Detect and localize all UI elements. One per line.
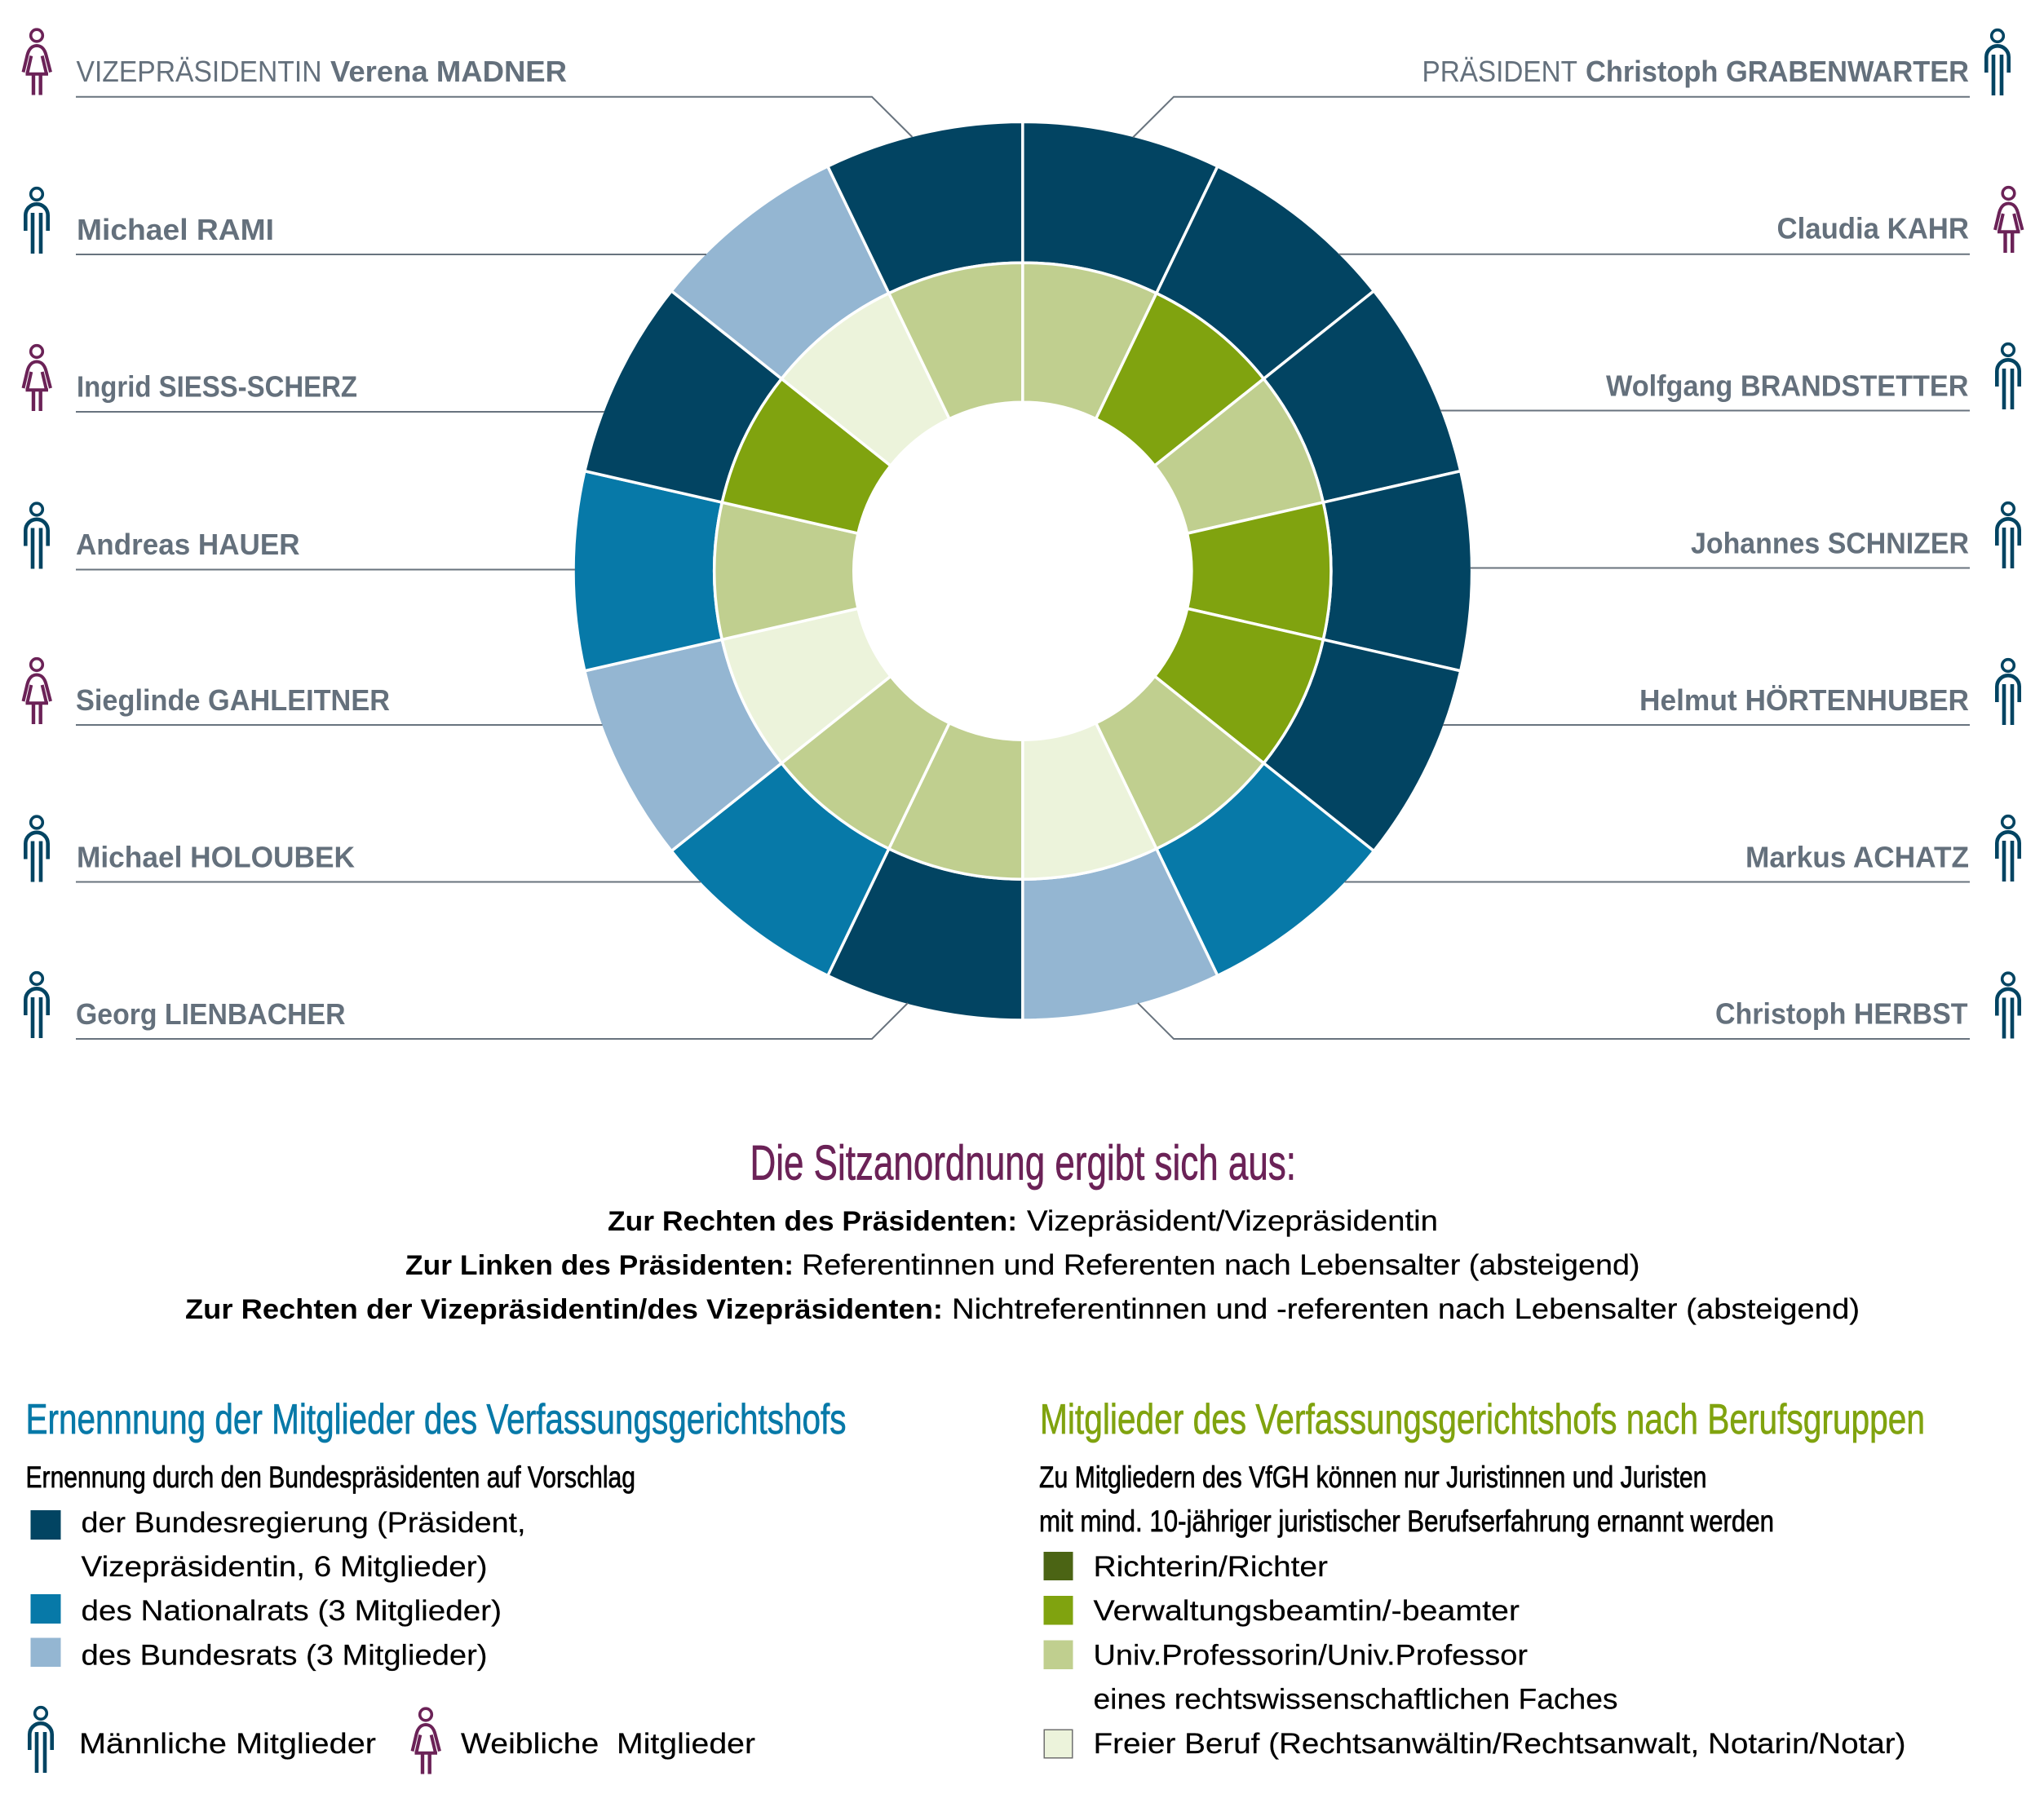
- member row: Markus Achatz: [1344, 816, 2020, 882]
- member row: Claudia Kahr: [1339, 188, 2023, 254]
- name label: Vizepräsidentin Verena Madner: [77, 55, 567, 88]
- name label: Christoph Herbst: Christoph HERBST: [1715, 996, 1967, 1031]
- icon: male member: [1986, 30, 2009, 95]
- icon: male member: [25, 503, 48, 569]
- legend item: federal government: Vizepräsidentin, 6 Mitglieder): [82, 1551, 488, 1583]
- icon: male member: [1997, 660, 2020, 725]
- text line: right of the vice president: Nichtreferentinnen und -referenten nach Lebensalter (absteigend): [952, 1293, 1860, 1325]
- text block: eligibility requirements: Zu Mitgliedern des VfGH können nur Juristinnen und Juristen: [1039, 1460, 1706, 1494]
- text line: right of the president: [608, 1205, 1438, 1237]
- member row: Sieglinde Gahleitner: [23, 659, 602, 725]
- member row: Johannes Schnizer: [1470, 503, 2020, 568]
- name label: Wolfgang Brandstetter: Wolfgang BRANDSTETTER: [1606, 369, 1969, 403]
- legend item: civil servants: Verwaltungsbeamtin/-beamter: [1093, 1595, 1520, 1627]
- icon: male member: [1997, 503, 2020, 568]
- name label: Johannes Schnizer: Johannes SCHNIZER: [1691, 527, 1969, 559]
- panel: appointment legend: [26, 1396, 847, 1774]
- icon: female member: [23, 346, 51, 411]
- outer ring: appointing body: [542, 82, 1504, 1060]
- name label: Präsident Christoph Grabenwarter: [1422, 55, 1969, 88]
- name label: Sieglinde Gahleitner: Sieglinde GAHLEITNER: [76, 683, 390, 717]
- legend item: female members: [413, 1708, 755, 1774]
- text line: left of the president: [405, 1249, 1639, 1281]
- legend item: judges: Richterin/Richter: [1093, 1551, 1328, 1583]
- name label: Markus Achatz: Markus ACHATZ: [1745, 840, 1969, 874]
- name label: Vizepräsidentin Verena Madner: Verena MADNER: [330, 55, 567, 88]
- name label: Präsident Christoph Grabenwarter: Christoph GRABENWARTER: [1586, 55, 1969, 88]
- legend item: federal government: der Bundesregierung (Präsident,: [82, 1507, 525, 1539]
- name label: Andreas Hauer: Andreas HAUER: [76, 528, 300, 561]
- member row: Wolfgang Brandstetter: [1440, 344, 2020, 411]
- member row: Christoph Herbst: [1138, 973, 2020, 1039]
- member row: Christoph Grabenwarter: [1133, 30, 2009, 138]
- text block: eligibility requirements: [1039, 1460, 1774, 1538]
- name label: Präsident Christoph Grabenwarter: PRÄSIDENT: [1422, 55, 1577, 88]
- member row: Michael Rami: [25, 188, 706, 254]
- icon: female member: [23, 29, 51, 95]
- legend item: university professors: Univ.Professorin/Univ.Professor: [1093, 1639, 1528, 1672]
- member row: Georg Lienbacher: [25, 973, 908, 1039]
- legend item: university professors: [1044, 1639, 1618, 1716]
- icon: male member: [25, 816, 48, 882]
- heading: seating order: Die Sitzanordnung ergibt sich aus:: [750, 1135, 1296, 1191]
- icon: female member: [23, 659, 51, 724]
- panel: professional groups legend: [1039, 1396, 1925, 1760]
- name label: Ingrid Siess-Scherz: Ingrid SIESS-SCHERZ: [77, 370, 357, 403]
- legend item: male members: [29, 1708, 376, 1773]
- member row: Michael Holoubek: [25, 816, 701, 882]
- name label: Michael Holoubek: Michael HOLOUBEK: [77, 840, 355, 874]
- icon: male member: [1997, 973, 2020, 1039]
- legend item: federal council: des Bundesrats (3 Mitglieder): [82, 1639, 488, 1672]
- icon: male member: [1997, 816, 2020, 882]
- subheading: appointment by federal president: Ernennung durch den Bundespräsidenten auf Vorschlag: [26, 1460, 635, 1494]
- name label: Helmut Hörtenhuber: Helmut HÖRTENHUBER: [1639, 683, 1969, 717]
- member row: Andreas Hauer: [25, 503, 575, 569]
- legend item: federal government: [31, 1507, 525, 1583]
- legend item: national council: des Nationalrats (3 Mitglieder): [82, 1595, 502, 1627]
- text line: right of the vice president: Zur Rechten der Vizepräsidentin/des Vizepräsidenten:: [185, 1294, 943, 1325]
- legend item: liberal professions: Freier Beruf (Rechtsanwältin/Rechtsanwalt, Notarin/Notar): [1093, 1728, 1905, 1760]
- panel: seating order explanation: [185, 1135, 1860, 1325]
- name label: Georg Lienbacher: Georg LIENBACHER: [76, 997, 346, 1031]
- text line: left of the president: Zur Linken des Präsidenten:: [405, 1250, 794, 1281]
- name label: Michael Rami: Michael RAMI: [77, 213, 274, 246]
- text line: right of the president: Vizepräsident/Vizepräsidentin: [1027, 1205, 1438, 1237]
- inner ring: professional group: [692, 235, 1353, 907]
- text line: left of the president: Referentinnen und Referenten nach Lebensalter (absteigend): [802, 1249, 1639, 1281]
- legend item: university professors: eines rechtswissenschaftlichen Faches: [1093, 1683, 1618, 1716]
- name label: Claudia Kahr: Claudia KAHR: [1776, 212, 1969, 245]
- heading: appointment of members: Ernennnung der Mitglieder des Verfassungsgerichtshofs: [26, 1396, 847, 1443]
- legend item: female members: Weibliche Mitglieder: [461, 1728, 755, 1760]
- text line: right of the president: Zur Rechten des Präsidenten:: [608, 1206, 1017, 1237]
- text line: right of the vice president: [185, 1293, 1860, 1325]
- member row: Verena Madner: [23, 29, 912, 137]
- icon: male member: [1997, 344, 2020, 409]
- icon: male member: [25, 188, 48, 254]
- donut chart: seating arrangement: [542, 82, 1504, 1060]
- legend item: male members: Männliche Mitglieder: [79, 1728, 376, 1760]
- icon: male member: [25, 973, 48, 1038]
- text block: eligibility requirements: mit mind. 10-jähriger juristischer Berufserfahrung ernannt werden: [1039, 1505, 1774, 1538]
- member row: Helmut Hörtenhuber: [1443, 660, 2020, 725]
- member row: Ingrid Siess-Scherz: [23, 346, 604, 412]
- name label: Vizepräsidentin Verena Madner: VIZEPRÄSIDENTIN: [77, 55, 321, 88]
- icon: female member: [1995, 188, 2023, 253]
